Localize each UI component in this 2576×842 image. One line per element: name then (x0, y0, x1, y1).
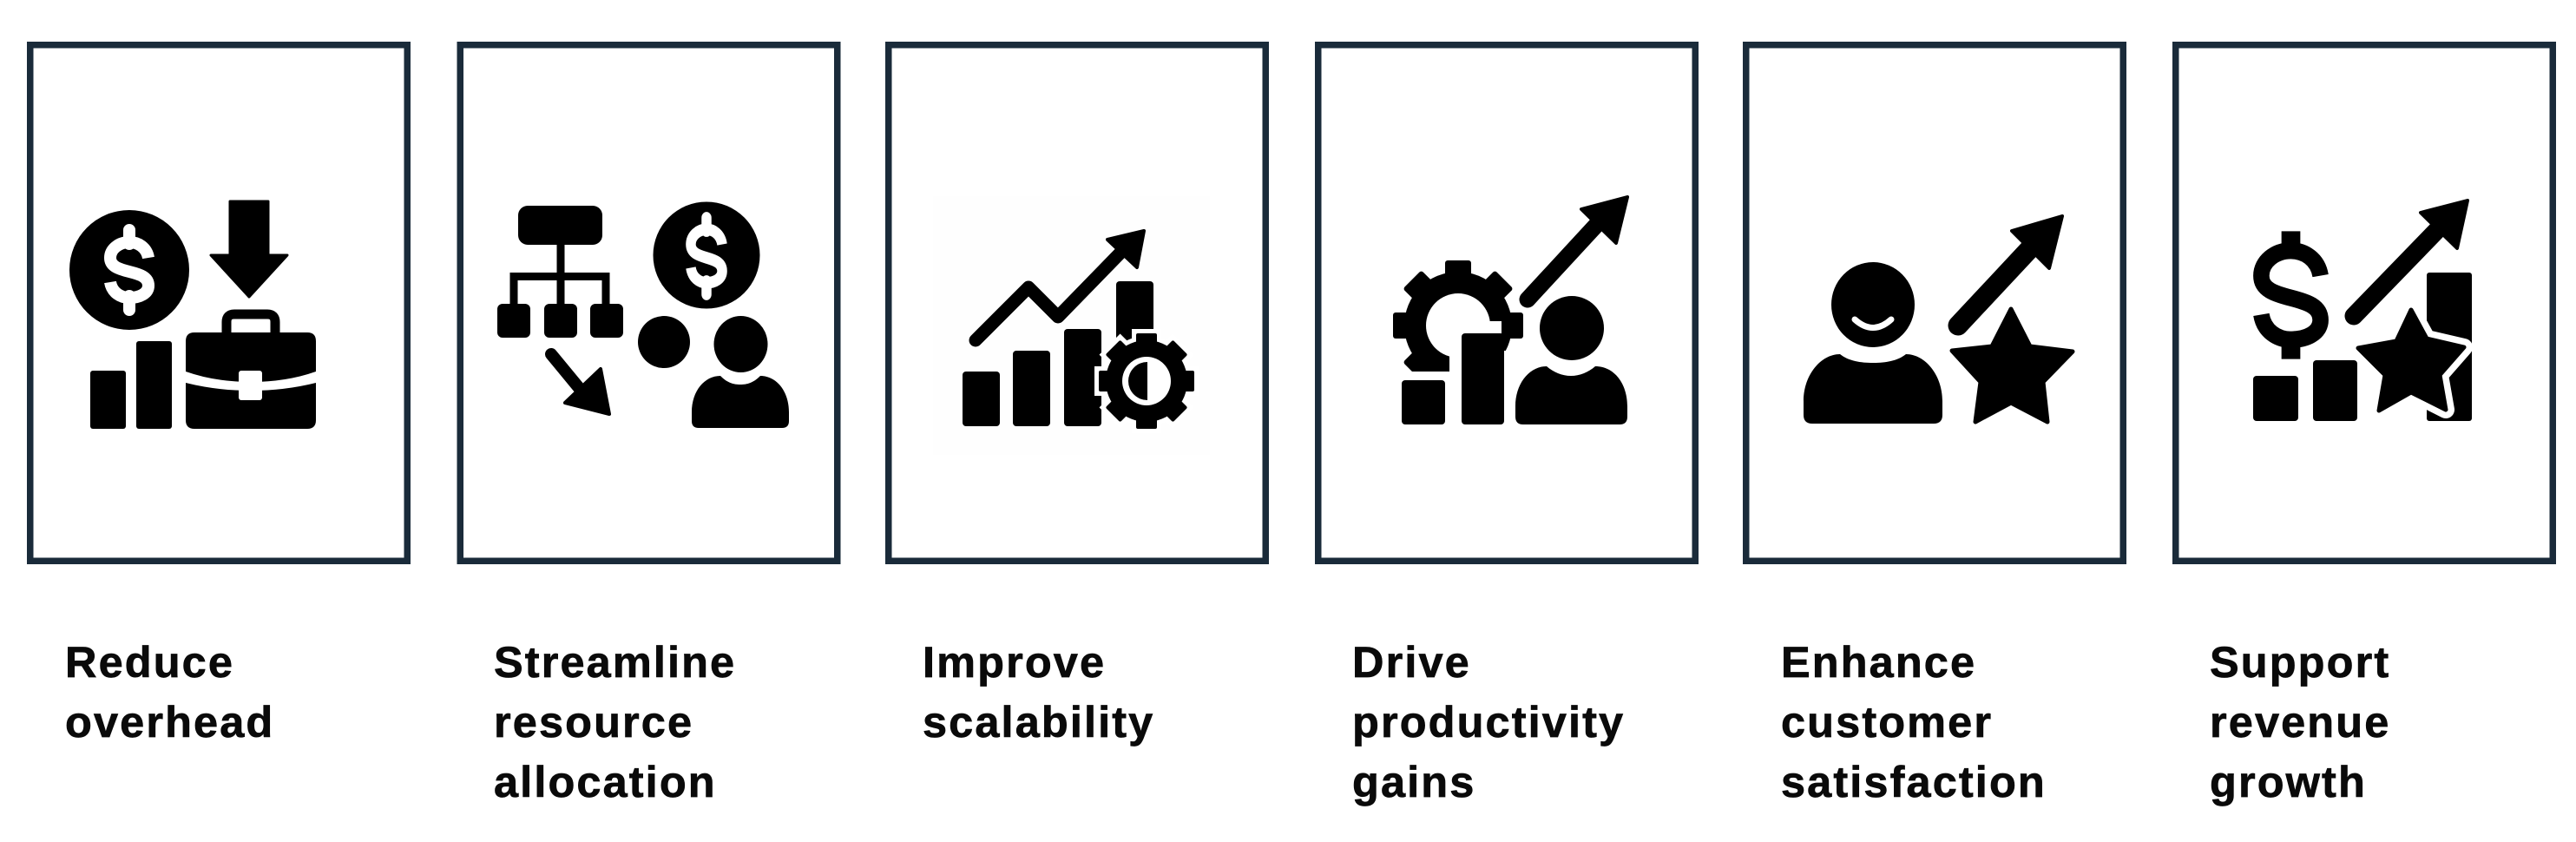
icon: org chart, arrow, coin and people (497, 201, 789, 428)
label: productivity (1352, 697, 1625, 747)
up arrow (1528, 197, 1627, 299)
dollar sign (2261, 231, 2321, 359)
label: overhead (65, 697, 274, 747)
bar chart (90, 341, 172, 429)
label: Enhance (1781, 637, 1976, 687)
icon: gear, bars, person and arrow (1389, 197, 1627, 424)
zigzag arrow (976, 231, 1144, 340)
up arrow (1958, 216, 2062, 326)
dollar coin (653, 201, 760, 309)
dollar coin (69, 210, 189, 330)
label: resource (494, 697, 693, 747)
org chart (497, 206, 623, 338)
label: allocation (494, 757, 717, 806)
panel frame (460, 45, 838, 561)
label: Support (2210, 637, 2390, 687)
panel: support revenue growth (2176, 45, 2553, 806)
panel frame (1318, 45, 1695, 561)
label: Streamline (494, 637, 736, 687)
icon: dollar, bars, star and arrow (2253, 201, 2472, 421)
panel: drive productivity gains (1318, 45, 1695, 806)
label: scalability (923, 697, 1154, 747)
icon: dollar coin, down arrow, bars and briefcase (69, 201, 316, 429)
bars (2253, 273, 2472, 421)
panel frame (889, 45, 1265, 561)
up arrow (2354, 201, 2468, 316)
panel: improve scalability (889, 45, 1265, 747)
panel: streamline resource allocation (460, 45, 838, 806)
panel: reduce overhead (30, 45, 407, 747)
gear (1389, 260, 1536, 399)
label: Drive (1352, 637, 1471, 687)
label: customer (1781, 697, 1993, 747)
star (1952, 309, 2073, 422)
label: revenue (2210, 697, 2390, 747)
label: Reduce (65, 637, 234, 687)
gear (1099, 333, 1194, 429)
star outline (2358, 310, 2464, 411)
smiling person (1804, 262, 1942, 424)
panel frame (1746, 45, 2123, 561)
panel frame (2176, 45, 2553, 561)
icon: smiling person, arrow and star (1804, 216, 2073, 424)
label: Improve (923, 637, 1106, 687)
icon: rising chart and gear (933, 196, 1210, 455)
star fill (2358, 310, 2464, 411)
label: gains (1352, 757, 1475, 806)
people (638, 316, 789, 428)
briefcase (186, 314, 316, 429)
bars (1402, 333, 1504, 424)
bars (963, 281, 1153, 426)
label: satisfaction (1781, 757, 2047, 806)
panel: enhance customer satisfaction (1746, 45, 2123, 806)
label: growth (2210, 757, 2367, 806)
down arrow (211, 201, 287, 297)
diagonal down arrow (551, 354, 609, 414)
panel frame (30, 45, 407, 561)
person (1515, 296, 1627, 424)
